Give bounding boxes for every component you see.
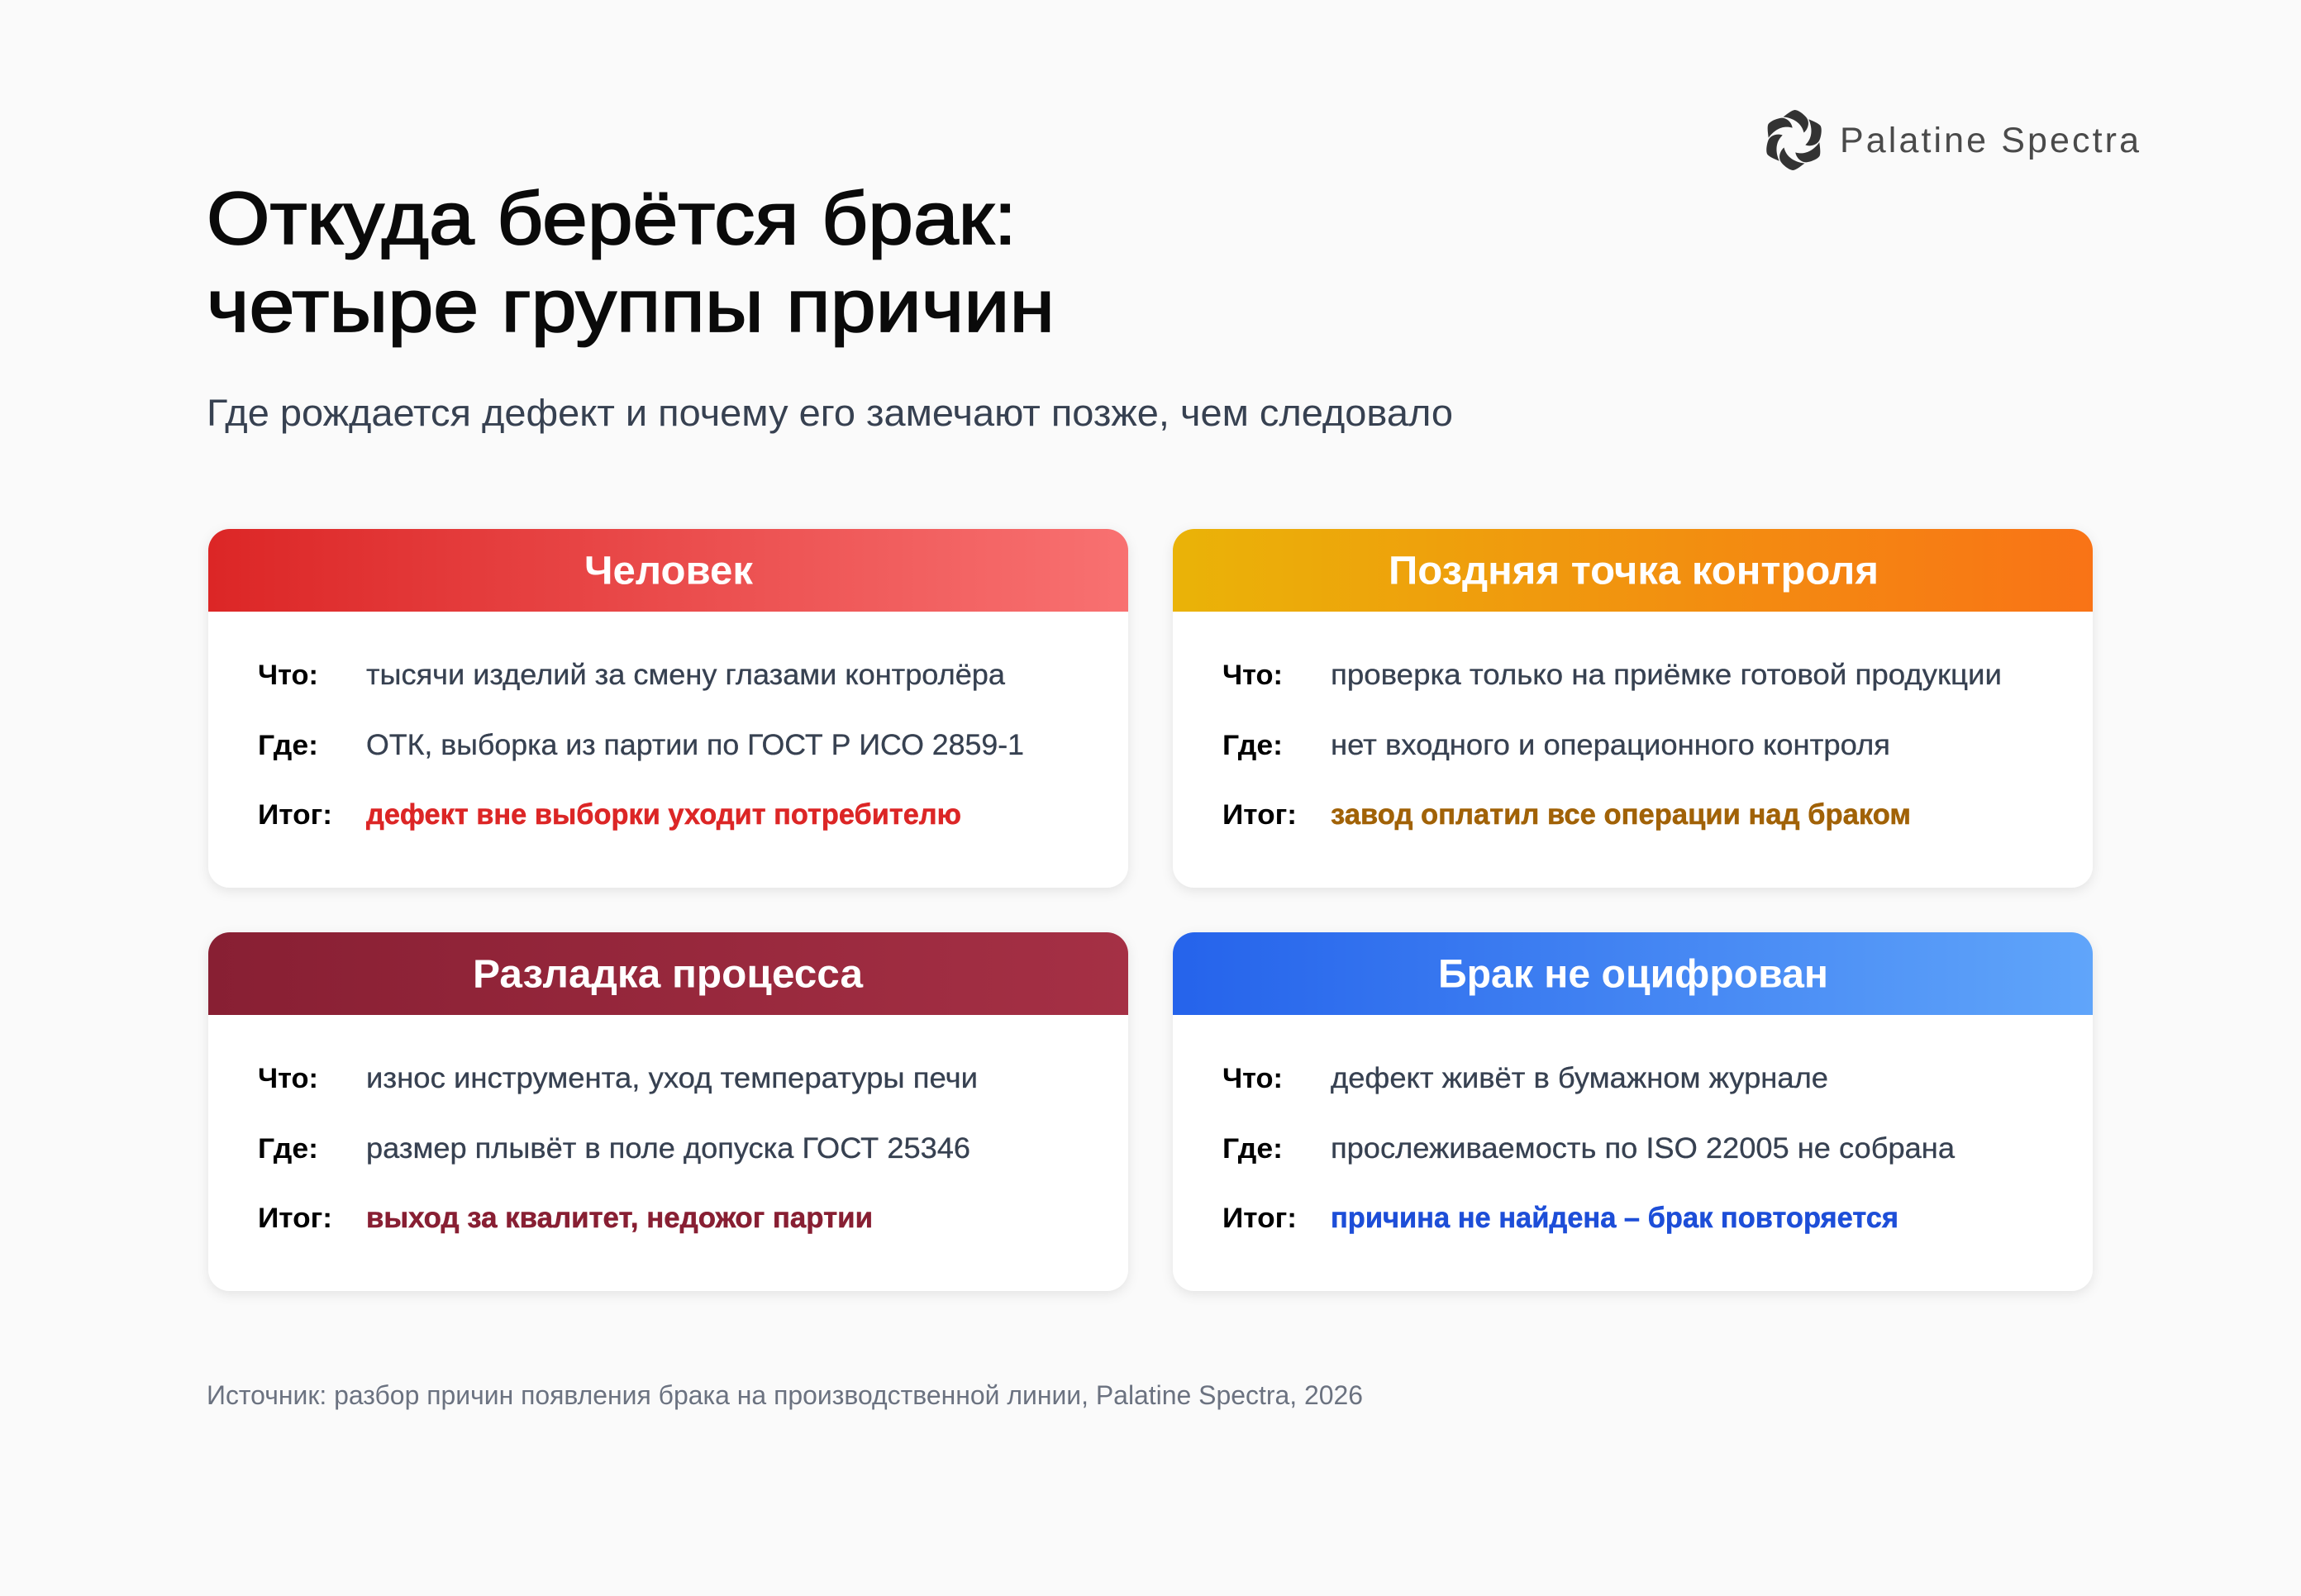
source note: Источник: разбор причин появления брака на производственной линии, Palatine Spectra, 2026 xyxy=(207,1380,1363,1410)
row: итог: Итог: xyxy=(258,799,332,831)
row: где: Где: xyxy=(258,730,318,761)
row: итог: выход за квалитет, недожог партии xyxy=(366,1202,873,1234)
panel: Брак не оцифрован xyxy=(1173,932,2093,1291)
panel: Поздняя точка контроля xyxy=(1173,529,2093,888)
row: где: нет входного и операционного контроля xyxy=(1331,729,1890,761)
row: итог: дефект вне выборки уходит потребителю xyxy=(366,798,961,831)
panel header xyxy=(208,932,1128,1015)
panel heading: Человек xyxy=(584,549,754,593)
row: где: Где: xyxy=(1222,730,1283,761)
row: итог: завод оплатил все операции над браком xyxy=(1331,798,1911,831)
title: Откуда берётся брак: xyxy=(207,178,1017,260)
logo: Palatine Spectra xyxy=(1760,110,2139,170)
panel heading: Брак не оцифрован xyxy=(1438,952,1828,997)
panel heading: Разладка процесса xyxy=(473,952,863,997)
panel header xyxy=(1173,932,2093,1015)
panel header xyxy=(1173,529,2093,612)
row: что: Что: xyxy=(1222,1063,1283,1094)
row: что: Что: xyxy=(258,1063,318,1094)
panel: Разладка процесса xyxy=(208,932,1128,1291)
icon: swirl mark xyxy=(1760,110,1827,170)
row: что: износ инструмента, уход температуры печи xyxy=(366,1062,978,1094)
row: что: Что: xyxy=(1222,660,1283,691)
row: что: проверка только на приёмке готовой продукции xyxy=(1331,659,2002,691)
panel header xyxy=(208,529,1128,612)
subtitle: Где рождается дефект и почему его замечают позже, чем следовало xyxy=(207,392,1453,434)
logo wordmark: Palatine Spectra xyxy=(1840,121,2139,160)
row: итог: Итог: xyxy=(258,1203,332,1234)
title xyxy=(207,178,1055,348)
row: итог: Итог: xyxy=(1222,799,1297,831)
row: где: Где: xyxy=(1222,1133,1283,1165)
row: что: Что: xyxy=(258,660,318,691)
row: что: дефект живёт в бумажном журнале xyxy=(1331,1062,1828,1094)
row: итог: причина не найдена – брак повторяется xyxy=(1331,1202,1898,1234)
row: где: размер плывёт в поле допуска ГОСТ 25346 xyxy=(366,1132,970,1165)
panel: Человек xyxy=(208,529,1128,888)
row: где: ОТК, выборка из партии по ГОСТ Р ИСО 2859-1 xyxy=(366,729,1024,761)
row: где: прослеживаемость по ISO 22005 не собрана xyxy=(1331,1132,1956,1165)
row: что: тысячи изделий за смену глазами контролёра xyxy=(366,659,1006,691)
panel heading: Поздняя точка контроля xyxy=(1389,549,1879,593)
row: где: Где: xyxy=(258,1133,318,1165)
title: четыре группы причин xyxy=(207,265,1055,348)
row: итог: Итог: xyxy=(1222,1203,1297,1234)
